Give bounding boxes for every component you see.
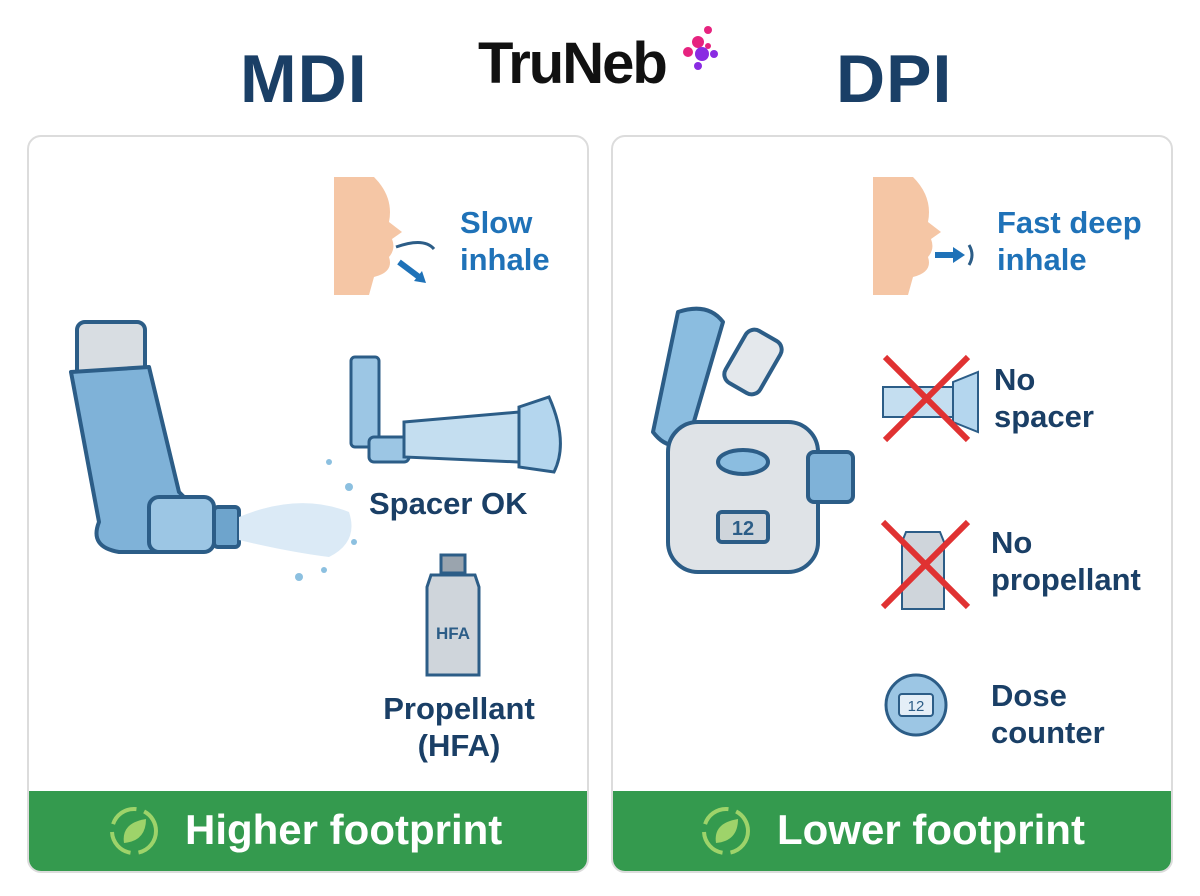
text: No spacer: spacer (994, 399, 1094, 434)
text: Dose counter: Dose (991, 678, 1067, 713)
text: No propellant: propellant (991, 562, 1141, 597)
icon: dose counter: 12 (908, 698, 924, 715)
icon: DPI device (651, 306, 855, 574)
panel: MDI (27, 135, 589, 873)
icon: no propellant (880, 520, 970, 610)
title: MDI: MDI (240, 41, 368, 117)
text: Slow inhale: Slow (460, 205, 532, 240)
footer: Lower footprint (613, 791, 1171, 871)
text: No spacer: No (994, 362, 1035, 397)
title: DPI: DPI (836, 41, 952, 117)
text: Fast deep inhale (997, 205, 1142, 277)
text: Propellant (HFA): (HFA) (418, 728, 500, 763)
icon: HFA can (426, 554, 480, 676)
footer: Higher footprint: Higher footprint (185, 806, 502, 853)
logo: TruNeb: TruNeb (478, 31, 666, 96)
icon: spacer (350, 356, 562, 474)
footer: Lower footprint: Lower footprint (777, 806, 1085, 853)
icon: face fast inhale (873, 177, 974, 295)
text: Slow inhale (460, 205, 550, 277)
icon: MDI inhaler (69, 320, 357, 581)
text: Dose counter (991, 678, 1105, 750)
text: No spacer (994, 362, 1094, 434)
text: Fast deep inhale: Fast deep (997, 205, 1142, 240)
text: Slow inhale: inhale (460, 242, 550, 277)
text: Fast deep inhale: inhale (997, 242, 1087, 277)
text: No propellant (991, 525, 1141, 597)
panel: DPI (611, 135, 1173, 873)
icon: dose counter (884, 674, 948, 736)
text: No propellant: No (991, 525, 1032, 560)
text: Propellant (HFA) (383, 691, 535, 763)
text: Dose counter: counter (991, 715, 1105, 750)
icon: DPI device: 12 (732, 518, 754, 540)
icon: face slow inhale (334, 177, 436, 295)
text: Propellant (HFA): Propellant (383, 691, 535, 726)
text: Spacer OK: Spacer OK (369, 486, 528, 521)
icon: HFA can: HFA (436, 624, 470, 643)
icon: no spacer (882, 354, 979, 442)
footer: Higher footprint (29, 791, 587, 871)
